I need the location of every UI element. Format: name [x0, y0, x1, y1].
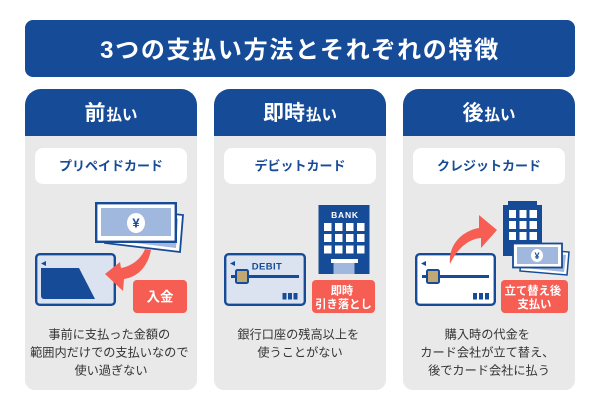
card name: prepaid	[35, 148, 187, 184]
tag: instant debit: 引き落とし	[315, 297, 372, 311]
card name: credit	[413, 148, 565, 184]
heading: credit: 後払い	[462, 102, 516, 125]
icon: debit card: DEBIT	[252, 262, 282, 272]
description: prepaid: 事前に支払った金額の	[48, 326, 170, 342]
tag: deposit: 入金	[146, 288, 174, 304]
icon: company building	[503, 201, 542, 256]
icon: bank building	[318, 205, 370, 274]
icon: prepaid card	[36, 254, 115, 305]
arrow: deposit	[105, 249, 151, 291]
arrow: advance payment	[450, 215, 497, 264]
panel: debit	[214, 89, 386, 390]
description: credit: カード会社が立て替え、	[420, 344, 554, 360]
description: prepaid: 範囲内だけでの支払いなので	[30, 344, 189, 360]
icon: banknotes: ¥	[132, 216, 140, 230]
description: debit: 使うことがない	[257, 344, 343, 360]
tag: instant debit: 即時	[331, 284, 353, 298]
card name: prepaid: プリペイドカード	[59, 158, 163, 174]
tag: advance then pay later: 支払い	[518, 297, 551, 311]
description: prepaid: 使い過ぎない	[74, 362, 148, 378]
card name: debit: デビットカード	[254, 158, 346, 174]
tag: advance then pay later: 立て替え後	[505, 284, 562, 298]
heading: prepaid: 前払い	[84, 102, 138, 125]
card name: credit: クレジットカード	[437, 158, 541, 174]
icon: debit card	[225, 254, 305, 305]
title: 3つの支払い方法とそれぞれの特徴	[100, 37, 500, 64]
panel: prepaid	[25, 89, 197, 390]
icon: banknotes: ¥	[534, 251, 540, 261]
description: debit: 銀行口座の残高以上を	[237, 328, 359, 342]
description: credit: 後でカード会社に払う	[428, 362, 550, 378]
icon: credit card	[416, 254, 495, 305]
description: credit: 購入時の代金を	[445, 328, 530, 342]
icon: banknotes	[96, 203, 183, 252]
tag: deposit	[133, 280, 187, 313]
card name: debit	[224, 148, 376, 184]
tag: instant debit	[312, 280, 375, 313]
tag: advance then pay later	[501, 280, 568, 313]
heading: debit: 即時払い	[263, 102, 337, 125]
panel: credit	[403, 89, 575, 390]
icon: banknotes	[513, 244, 569, 275]
title	[25, 20, 575, 77]
icon: bank building: BANK	[331, 210, 359, 220]
